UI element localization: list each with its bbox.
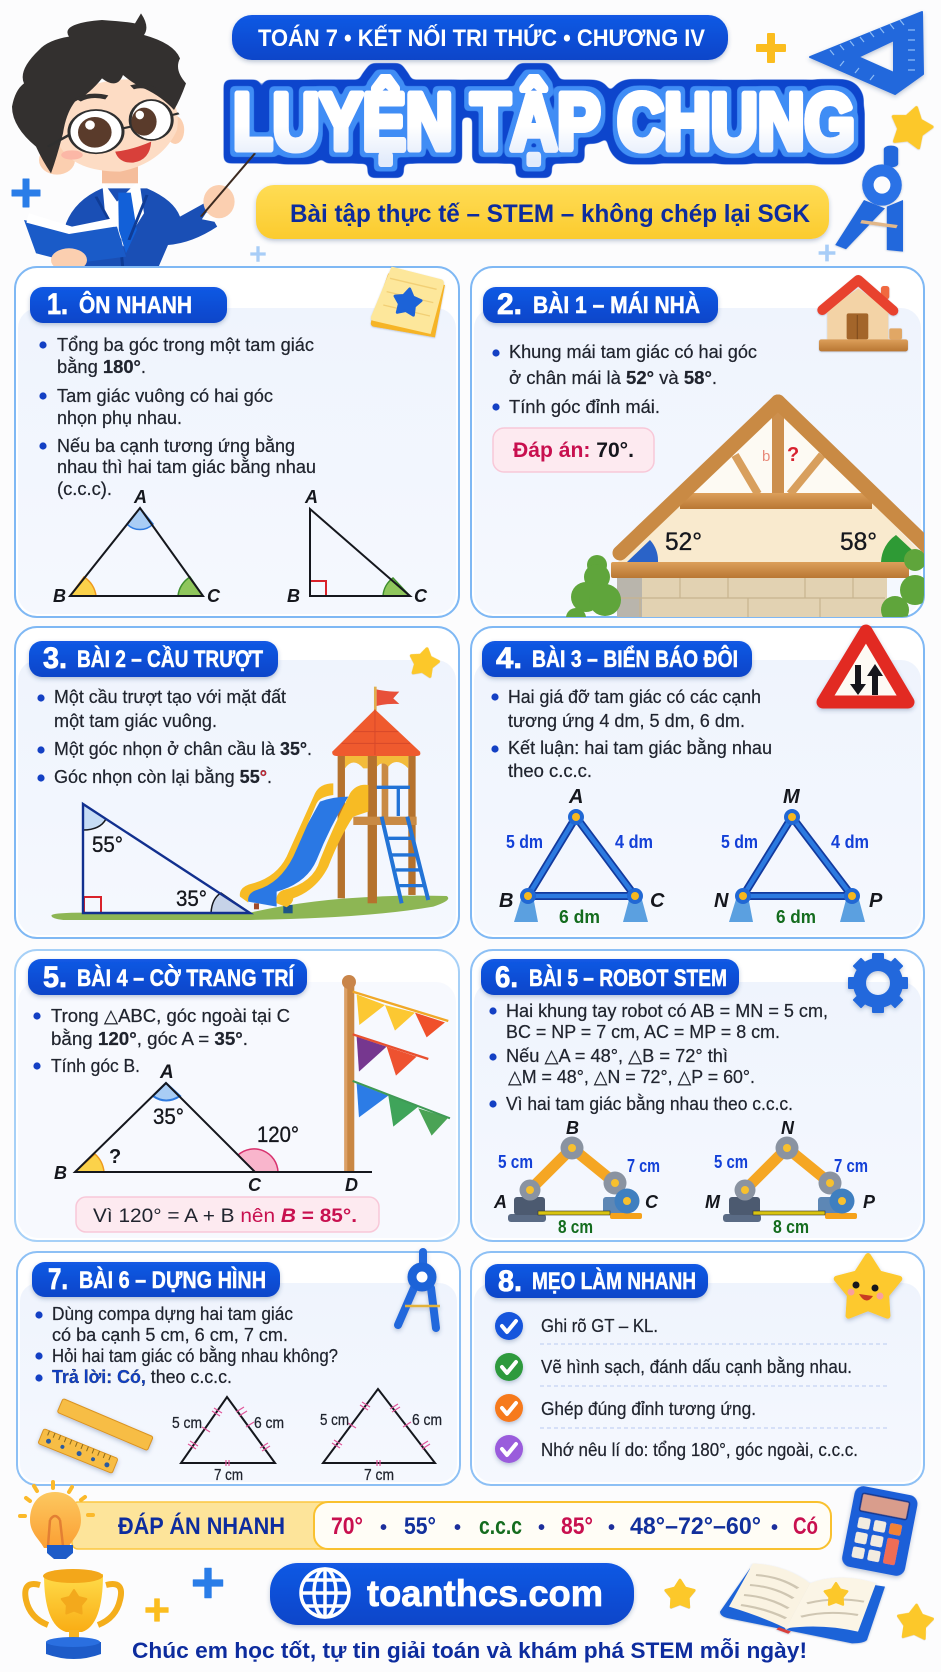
icon: light bulb xyxy=(20,1482,93,1559)
panel: on nhanh xyxy=(15,267,459,617)
bullet list xyxy=(35,1303,338,1387)
icon: trophy xyxy=(25,1569,121,1659)
header: course label pill xyxy=(232,15,728,60)
truss frame MNP: N xyxy=(714,890,729,912)
flag pole with bunting xyxy=(342,975,450,1172)
bullet list xyxy=(489,1000,828,1114)
truss frame ABC: 5 dm xyxy=(506,832,543,852)
panel: bai 1 mai nha xyxy=(471,267,930,628)
slide triangle with angles: 55° xyxy=(92,832,123,857)
triangle ABC with exterior angle: ? xyxy=(109,1146,121,1168)
robot length labels: 7 cm xyxy=(834,1156,868,1176)
robot length labels: 7 cm xyxy=(627,1156,660,1176)
truss frame ABC: C xyxy=(650,890,665,912)
quick answers values: • xyxy=(538,1517,545,1539)
heading badge 3 xyxy=(29,641,278,677)
triangle construction right: 7 cm xyxy=(364,1467,394,1484)
truss frame MNP: 6 dm xyxy=(776,907,816,927)
heading badge 4: BÀI 3 – BIỂN BÁO ĐÔI xyxy=(532,645,738,673)
quick answers values: • xyxy=(608,1517,615,1539)
triangle ABC with exterior angle: A xyxy=(159,1062,174,1083)
bullet list: ở chân mái là 52° và 58°. xyxy=(509,367,717,388)
panel: bai 4 co trang tri xyxy=(15,950,459,1241)
subtitle banner: Bài tập thực tế – STEM – không chép lại SGK xyxy=(290,200,810,228)
icon: open book xyxy=(720,1563,885,1643)
bullet list xyxy=(491,686,772,781)
bullet list xyxy=(39,334,316,499)
truss frame MNP xyxy=(714,786,883,927)
heading badge 8 xyxy=(485,1264,708,1298)
heading badge 3: 3. xyxy=(43,642,67,675)
icon: pale plus left xyxy=(250,246,266,262)
icon: blue plus xyxy=(12,179,40,207)
solution box xyxy=(76,1197,379,1232)
heading badge 1: ÔN NHANH xyxy=(79,291,192,319)
right triangle ABC: C xyxy=(414,586,428,606)
bullet list: theo c.c.c. xyxy=(508,760,592,781)
heading badge 6: 6. xyxy=(495,961,518,994)
heading badge 6: BÀI 5 – ROBOT STEM xyxy=(529,964,727,992)
panel: bai 3 bien bao doi xyxy=(471,627,924,938)
triangle construction right: 6 cm xyxy=(412,1412,442,1429)
robot length labels: A xyxy=(493,1192,507,1212)
robot arm MNP xyxy=(723,1136,857,1222)
bullet list: BC = NP = 7 cm, AC = MP = 8 cm. xyxy=(506,1021,780,1042)
quick answer bar xyxy=(72,1502,831,1549)
panel: bai 6 dung hinh xyxy=(17,1252,460,1485)
bullet list: Tổng ba góc trong một tam giác xyxy=(57,334,314,355)
panel: meo lam nhanh xyxy=(471,1252,924,1485)
triangle ABC with angles: A xyxy=(133,487,147,507)
tips list with check icons: Ghép đúng đỉnh tương ứng. xyxy=(541,1398,756,1419)
bullet list xyxy=(37,686,312,787)
heading badge 6 xyxy=(481,959,739,995)
truss frame ABC: 4 dm xyxy=(615,832,653,852)
icon: star xyxy=(408,646,440,677)
heading badge 5: BÀI 4 – CỜ TRANG TRÍ xyxy=(77,964,295,992)
website pill xyxy=(270,1563,634,1625)
heading badge 3: BÀI 2 – CẦU TRƯỢT xyxy=(77,645,263,673)
bullet list: △M = 48°, △N = 72°, △P = 60°. xyxy=(508,1066,755,1087)
closing message: Chúc em học tốt, tự tin giải toán và khám phá STEM mỗi ngày! xyxy=(132,1638,807,1663)
robot arm ABC xyxy=(508,1136,642,1222)
triangle construction right xyxy=(320,1389,442,1484)
grass ground xyxy=(51,896,448,920)
quick answers values: • xyxy=(771,1517,778,1539)
triangle ABC with exterior angle: D xyxy=(345,1175,358,1195)
bullet list: Trong △ABC, góc ngoài tại C xyxy=(51,1005,290,1026)
bullet list xyxy=(492,341,757,417)
roof truss illustration xyxy=(566,402,930,628)
heading badge 4 xyxy=(482,641,752,677)
truss frame MNP: 4 dm xyxy=(831,832,869,852)
heading badge 2: 2. xyxy=(497,288,522,321)
robot length labels: 8 cm xyxy=(773,1217,809,1237)
truss frame MNP: P xyxy=(869,890,883,912)
panel: bai 5 robot stem xyxy=(471,942,924,1241)
tips list with check icons: Nhớ nêu lí do: tổng 180°, góc ngoài, c.c.c. xyxy=(541,1439,858,1460)
right triangle ABC: B xyxy=(287,586,300,606)
solution box: Vì 120° = A + B nên B = 85°. xyxy=(93,1205,357,1227)
triangle construction right: 5 cm xyxy=(320,1412,349,1429)
icon: yellow plus bottom xyxy=(146,1599,168,1621)
icon: yellow plus xyxy=(757,34,785,62)
header: course label pill: TOÁN 7 • KẾT NỐI TRI THỨC • CHƯƠNG IV xyxy=(258,24,705,52)
robot length labels: B xyxy=(566,1118,579,1138)
icon: small house xyxy=(819,280,908,351)
icon: star right bottom xyxy=(897,1604,934,1639)
heading badge 5: 5. xyxy=(43,961,67,994)
truss frame MNP: M xyxy=(783,786,801,808)
quick answers values: 55° xyxy=(404,1513,436,1540)
roof truss illustration: 52° xyxy=(665,528,702,556)
bullet list: Vì hai tam giác bằng nhau theo c.c.c. xyxy=(506,1093,793,1114)
roof truss illustration: ? xyxy=(787,444,799,466)
bullet list: tương ứng 4 dm, 5 dm, 6 dm. xyxy=(508,710,745,731)
heading badge 2: BÀI 1 – MÁI NHÀ xyxy=(533,291,700,319)
roof truss illustration: 58° xyxy=(840,528,877,556)
bullet list: Tính góc đỉnh mái. xyxy=(509,396,660,417)
icon: boy teacher character xyxy=(12,13,255,272)
triangle ABC with angles: C xyxy=(207,586,221,606)
bullet list: Hai khung tay robot có AB = MN = 5 cm, xyxy=(506,1000,828,1021)
triangle ABC with exterior angle: C xyxy=(248,1175,262,1195)
icon: rulers xyxy=(38,1398,153,1473)
bullet list: nhau thì hai tam giác bằng nhau xyxy=(57,456,316,477)
quick answers values: 70° xyxy=(331,1513,363,1540)
icon: blue plus bottom xyxy=(193,1568,223,1598)
robot length labels: M xyxy=(705,1192,721,1212)
quick answers values: Có xyxy=(793,1513,818,1540)
bullet list: có ba cạnh 5 cm, 6 cm, 7 cm. xyxy=(52,1324,288,1345)
heading badge 1: 1. xyxy=(47,288,68,321)
heading badge 7: 7. xyxy=(48,1263,68,1296)
triangle ABC with angles: B xyxy=(53,586,66,606)
quick answers values: c.c.c xyxy=(479,1513,522,1540)
triangle construction left: 7 cm xyxy=(214,1467,243,1484)
bullet list: Nếu △A = 48°, △B = 72° thì xyxy=(506,1045,728,1066)
robot length labels: N xyxy=(781,1118,795,1138)
icon: drawing compass xyxy=(835,146,903,252)
tips list with check icons: Vẽ hình sạch, đánh dấu cạnh bằng nhau. xyxy=(541,1356,852,1377)
bullet list: Hỏi hai tam giác có bằng nhau không? xyxy=(52,1345,338,1366)
bullet list: (c.c.c). xyxy=(57,478,112,499)
icon: pale plus right xyxy=(819,245,835,261)
heading badge 4: 4. xyxy=(496,642,522,675)
heading badge 1 xyxy=(30,287,227,323)
heading badge 2 xyxy=(483,287,718,323)
icon: star on book xyxy=(825,1583,847,1605)
heading badge 8: 8. xyxy=(498,1265,522,1298)
icon: gold star xyxy=(887,103,936,150)
truss frame MNP: 5 dm xyxy=(721,832,758,852)
triangle ABC with angles xyxy=(53,487,221,606)
panel: bai 2 cau truot xyxy=(15,627,459,938)
quick answer label: ĐÁP ÁN NHANH xyxy=(118,1512,285,1540)
bullet list: Khung mái tam giác có hai góc xyxy=(509,341,757,362)
triangle construction left xyxy=(172,1397,284,1484)
robot length labels: 5 cm xyxy=(714,1152,748,1172)
bullet list xyxy=(33,1005,290,1076)
slide triangle with angles: 35° xyxy=(176,886,207,911)
bullet list: Kết luận: hai tam giác bằng nhau xyxy=(508,737,772,758)
bullet list: Hai giá đỡ tam giác có các cạnh xyxy=(508,686,761,707)
bullet list: Tính góc B. xyxy=(51,1055,140,1076)
heading badge 7 xyxy=(32,1262,280,1297)
triangle construction left: 5 cm xyxy=(172,1415,202,1432)
heading badge 5 xyxy=(28,959,307,995)
icon: calculator xyxy=(841,1485,919,1577)
bullet list: Một góc nhọn ở chân cầu là 35°. xyxy=(54,738,312,759)
quick answers values: 85° xyxy=(561,1513,593,1540)
robot length labels xyxy=(493,1118,876,1237)
triangle construction left: 6 cm xyxy=(254,1415,284,1432)
icon: globe xyxy=(301,1569,349,1617)
right triangle ABC xyxy=(287,487,428,606)
answer box xyxy=(493,428,654,472)
bullet list: Nếu ba cạnh tương ứng bằng xyxy=(57,435,295,456)
icon: star near url xyxy=(666,1580,694,1607)
icon: two-way traffic sign xyxy=(823,631,908,702)
icon: gear xyxy=(837,942,919,1024)
quick answers values xyxy=(331,1513,818,1540)
icon: compass small xyxy=(398,1252,440,1328)
bullet list: nhọn phụ nhau. xyxy=(57,407,182,428)
right triangle ABC: A xyxy=(304,487,318,507)
bullet list: bằng 180°. xyxy=(57,356,146,377)
tips list with check icons xyxy=(495,1312,890,1463)
robot length labels: C xyxy=(645,1192,659,1212)
website pill: toanthcs.com xyxy=(367,1573,603,1614)
icon: note with star xyxy=(371,267,445,337)
triangle ABC with exterior angle xyxy=(54,1062,372,1195)
triangle ABC with exterior angle: 35° xyxy=(153,1104,184,1129)
robot length labels: 8 cm xyxy=(558,1217,593,1237)
heading badge 7: BÀI 6 – DỰNG HÌNH xyxy=(79,1266,266,1294)
bullet list: Một cầu trượt tạo với mặt đất xyxy=(54,686,286,707)
icon: triangle ruler xyxy=(810,12,923,94)
truss frame ABC xyxy=(499,786,665,927)
bullet list: Dùng compa dựng hai tam giác xyxy=(52,1303,293,1324)
quick answers values: • xyxy=(454,1517,461,1539)
triangle ABC with exterior angle: 120° xyxy=(257,1122,299,1147)
bullet list: Góc nhọn còn lại bằng 55°. xyxy=(54,766,272,787)
bullet list: bằng 120°, góc A = 35°. xyxy=(51,1028,248,1049)
slide triangle with angles xyxy=(83,804,250,913)
heading badge 8: MẸO LÀM NHANH xyxy=(532,1267,696,1295)
bullet list: một tam giác vuông. xyxy=(54,710,217,731)
triangle ABC with exterior angle: B xyxy=(54,1163,67,1183)
bullet list: Tam giác vuông có hai góc xyxy=(57,385,273,406)
robot length labels: 5 cm xyxy=(498,1152,533,1172)
quick answers values: 48°–72°–60° xyxy=(630,1513,761,1540)
quick answers values: • xyxy=(380,1517,387,1539)
answer box: Đáp án: 70°. xyxy=(513,439,634,462)
bullet list: Trả lời: Có, theo c.c.c. xyxy=(52,1366,232,1387)
truss frame ABC: 6 dm xyxy=(559,907,600,927)
truss frame ABC: B xyxy=(499,890,513,912)
robot length labels: P xyxy=(863,1192,876,1212)
tips list with check icons: Ghi rõ GT – KL. xyxy=(541,1315,658,1336)
subtitle banner xyxy=(256,185,829,239)
playground slide illustration xyxy=(240,687,428,913)
truss frame ABC: A xyxy=(568,786,583,808)
icon: smiling star xyxy=(837,1256,899,1316)
roof truss illustration: b xyxy=(762,448,770,465)
